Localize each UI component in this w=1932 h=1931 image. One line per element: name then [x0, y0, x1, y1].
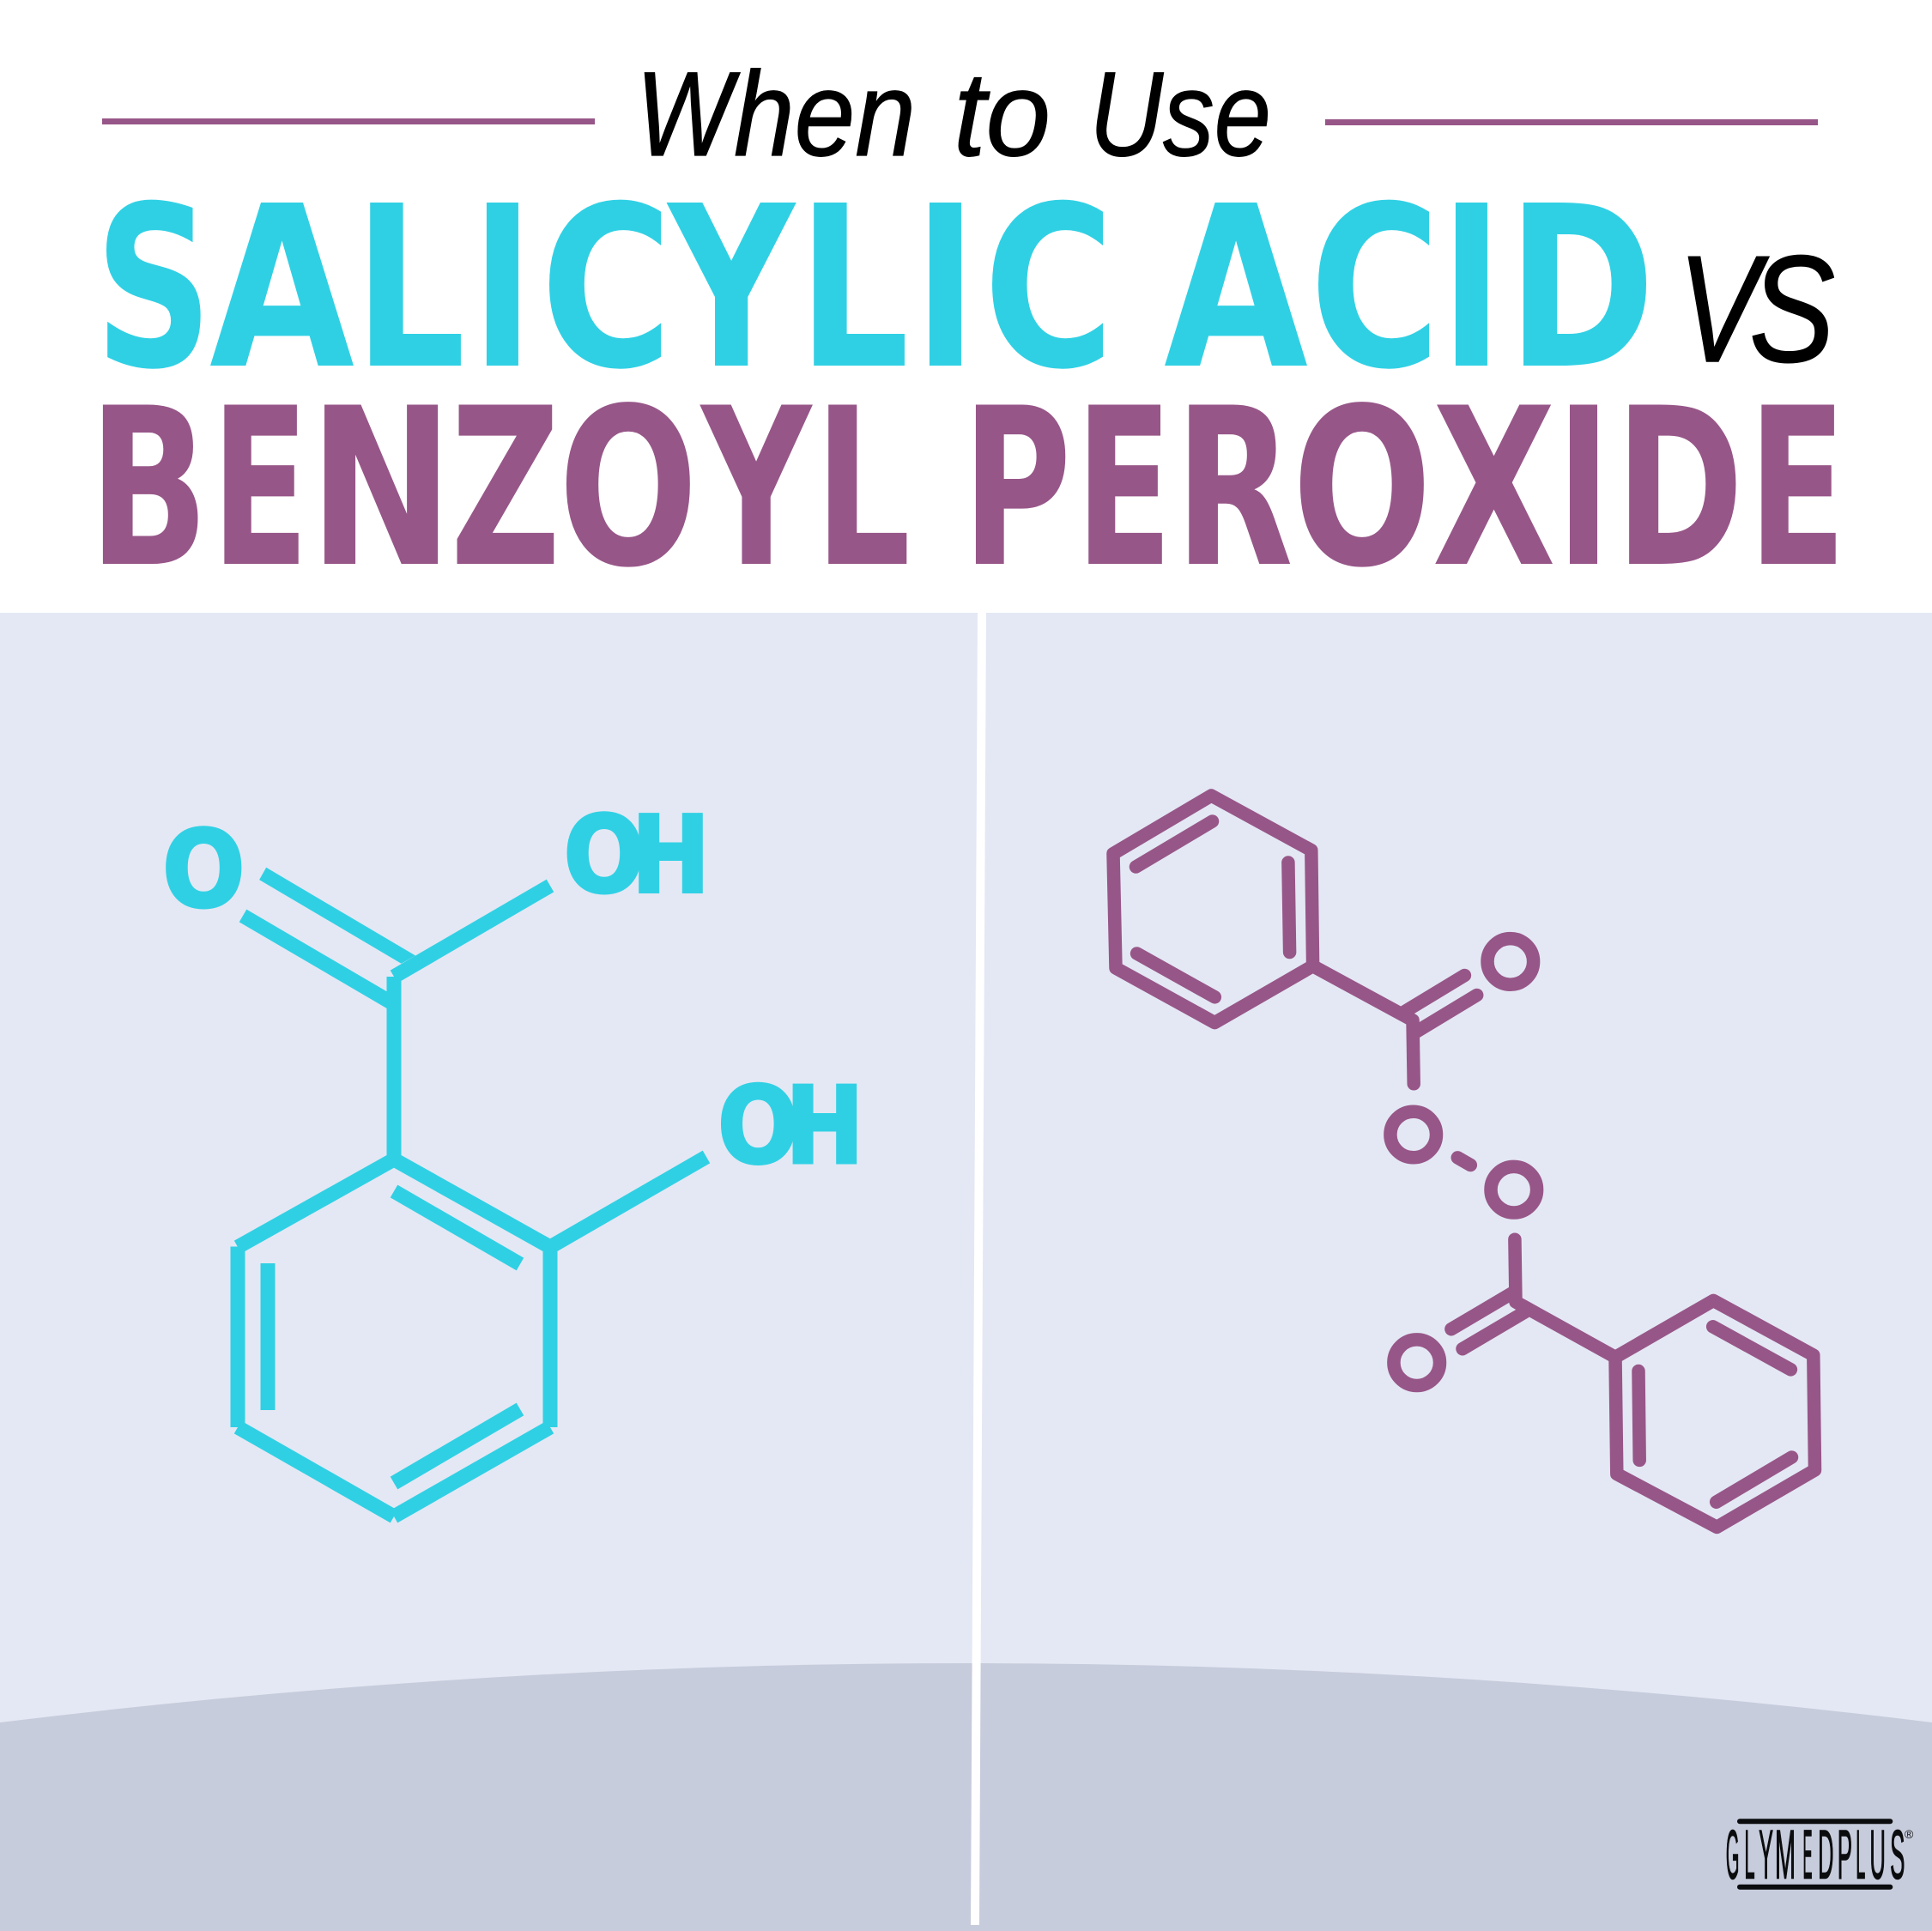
lower carbonyl group [1451, 1239, 1615, 1357]
title line 2: Benzoyl Peroxide: E [1075, 362, 1172, 616]
kicker: When to Use: W [636, 46, 741, 181]
oxygen atom: peroxide left [1390, 1111, 1436, 1158]
title line 2: Benzoyl Peroxide: I [1556, 362, 1611, 616]
panel: benzoyl peroxide background [984, 613, 1932, 1931]
oxygen atom: upper carbonyl [1487, 939, 1534, 984]
oxygen atom: peroxide right [1491, 1166, 1537, 1213]
peroxide bond [1457, 1158, 1470, 1165]
title line 1: Salicylic Acid: L [354, 159, 465, 419]
title line 2: Benzoyl Peroxide: E [211, 362, 309, 616]
title line 1: Salicylic Acid: I [914, 159, 977, 419]
kicker: When to Use: to [954, 46, 1051, 181]
title line 1: Salicylic Acid: C [984, 159, 1114, 419]
title line 2: Benzoyl Peroxide: Y [700, 362, 813, 616]
title line 1: Salicylic Acid: I [1440, 159, 1503, 419]
title line 2: Benzoyl Peroxide: D [1615, 362, 1744, 616]
title line 2: Benzoyl Peroxide: E [1748, 362, 1846, 616]
logo wordmark: D [1818, 1816, 1833, 1893]
title line 1: Salicylic Acid: L [798, 159, 910, 419]
atom label: carboxyl OH: O [564, 794, 645, 917]
logo wordmark: U [1869, 1816, 1886, 1893]
kicker: When to Use: hen [734, 46, 916, 181]
salicylic acid bonds [238, 868, 706, 1516]
logo wordmark: E [1802, 1816, 1813, 1893]
title line 1: Salicylic Acid: S [94, 159, 213, 419]
ground curve [0, 1663, 1932, 1931]
logo wordmark: P [1838, 1816, 1852, 1893]
logo bottom bar [1737, 1885, 1893, 1890]
title line 1: Salicylic Acid: C [1310, 159, 1440, 419]
title line 2: Benzoyl Peroxide: O [1292, 362, 1432, 616]
upper benzene ring [1113, 796, 1313, 1023]
slanted centre divider [971, 613, 986, 1925]
title line 2: Benzoyl Peroxide: N [309, 362, 454, 616]
title line 2: Benzoyl Peroxide: X [1432, 362, 1556, 616]
title line 1: Salicylic Acid: D [1507, 159, 1656, 419]
atom label: O: O [162, 808, 245, 932]
title connector: VS: V [1678, 224, 1769, 394]
registered mark: ® [1905, 1827, 1914, 1841]
oxygen atom: lower carbonyl [1394, 1340, 1439, 1385]
logo wordmark: M [1775, 1816, 1796, 1893]
atom label: carboxyl OH: H [632, 794, 710, 917]
heading rule right [1325, 119, 1818, 125]
title line 1: Salicylic Acid: A [209, 159, 356, 419]
title line 1: Salicylic Acid: A [1164, 159, 1310, 419]
upper carbonyl group [1313, 966, 1477, 1084]
logo top bar [1737, 1819, 1893, 1824]
logo wordmark: L [1856, 1816, 1865, 1893]
title line 2: Benzoyl Peroxide: R [1175, 362, 1293, 616]
logo wordmark: Y [1759, 1816, 1773, 1893]
panels backdrop [0, 613, 1932, 1931]
title line 2: Benzoyl Peroxide: Z [451, 362, 560, 616]
heading rule left [102, 118, 595, 124]
title line 1: Salicylic Acid: Y [665, 159, 796, 419]
title line 2: Benzoyl Peroxide: L [815, 362, 911, 616]
logo: GlyMed Plus [1726, 1816, 1914, 1893]
title line 2: Benzoyl Peroxide: P [962, 362, 1071, 616]
chart: salicylic acid molecule [162, 794, 863, 1516]
logo wordmark: L [1744, 1816, 1755, 1893]
lower benzene ring [1615, 1300, 1814, 1527]
title line 2: Benzoyl Peroxide: B [88, 362, 209, 616]
title line 1: Salicylic Acid: I [471, 159, 534, 419]
chart: benzoyl peroxide molecule [1113, 796, 1814, 1527]
panel: salicylic acid background [0, 613, 984, 1931]
title line 2: Benzoyl Peroxide: O [558, 362, 699, 616]
atom label: hydroxyl OH: O [718, 1064, 798, 1188]
title line 1: Salicylic Acid: C [541, 159, 673, 419]
logo wordmark: G [1726, 1816, 1739, 1893]
kicker: When to Use: Use [1089, 46, 1271, 181]
title connector: VS: S [1749, 224, 1835, 394]
atom label: hydroxyl OH: H [785, 1064, 863, 1188]
